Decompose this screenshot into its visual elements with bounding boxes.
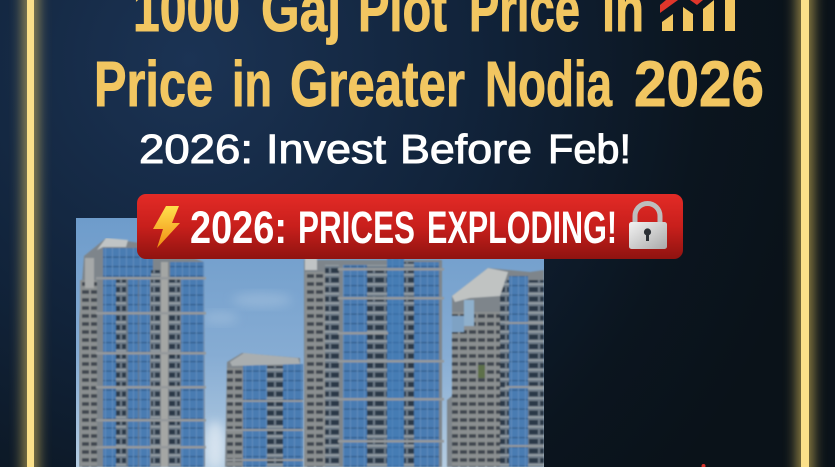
- icon: lightning bolt: [153, 206, 180, 248]
- subtitle: Feb!: [548, 126, 631, 172]
- subtitle: 2026:: [139, 126, 253, 172]
- title line 2: Price: [94, 48, 213, 120]
- tower 4: [447, 268, 544, 467]
- gold frame right bar: [798, 0, 812, 467]
- badge text: PRICES: [298, 202, 415, 253]
- icon: padlock: [629, 203, 667, 249]
- title line 2: Nodia: [485, 48, 612, 120]
- callout badge: [137, 194, 683, 259]
- title line 2: 2026: [634, 48, 764, 120]
- gold frame left bar: [24, 0, 37, 467]
- badge text: EXPLODING!: [427, 202, 617, 253]
- badge text: 2026:: [190, 202, 287, 253]
- title line 2: in: [232, 48, 272, 120]
- title line 2: Greater: [290, 48, 465, 120]
- tower 1: [79, 238, 206, 467]
- subtitle: Before: [400, 126, 532, 172]
- tower 3: [304, 258, 444, 467]
- photo: residential towers: [76, 218, 544, 467]
- icon: logo with bars and red arrow: [660, 0, 735, 31]
- red accent mark: [702, 464, 706, 467]
- tower 2: [225, 353, 303, 467]
- subtitle: Invest: [266, 126, 387, 172]
